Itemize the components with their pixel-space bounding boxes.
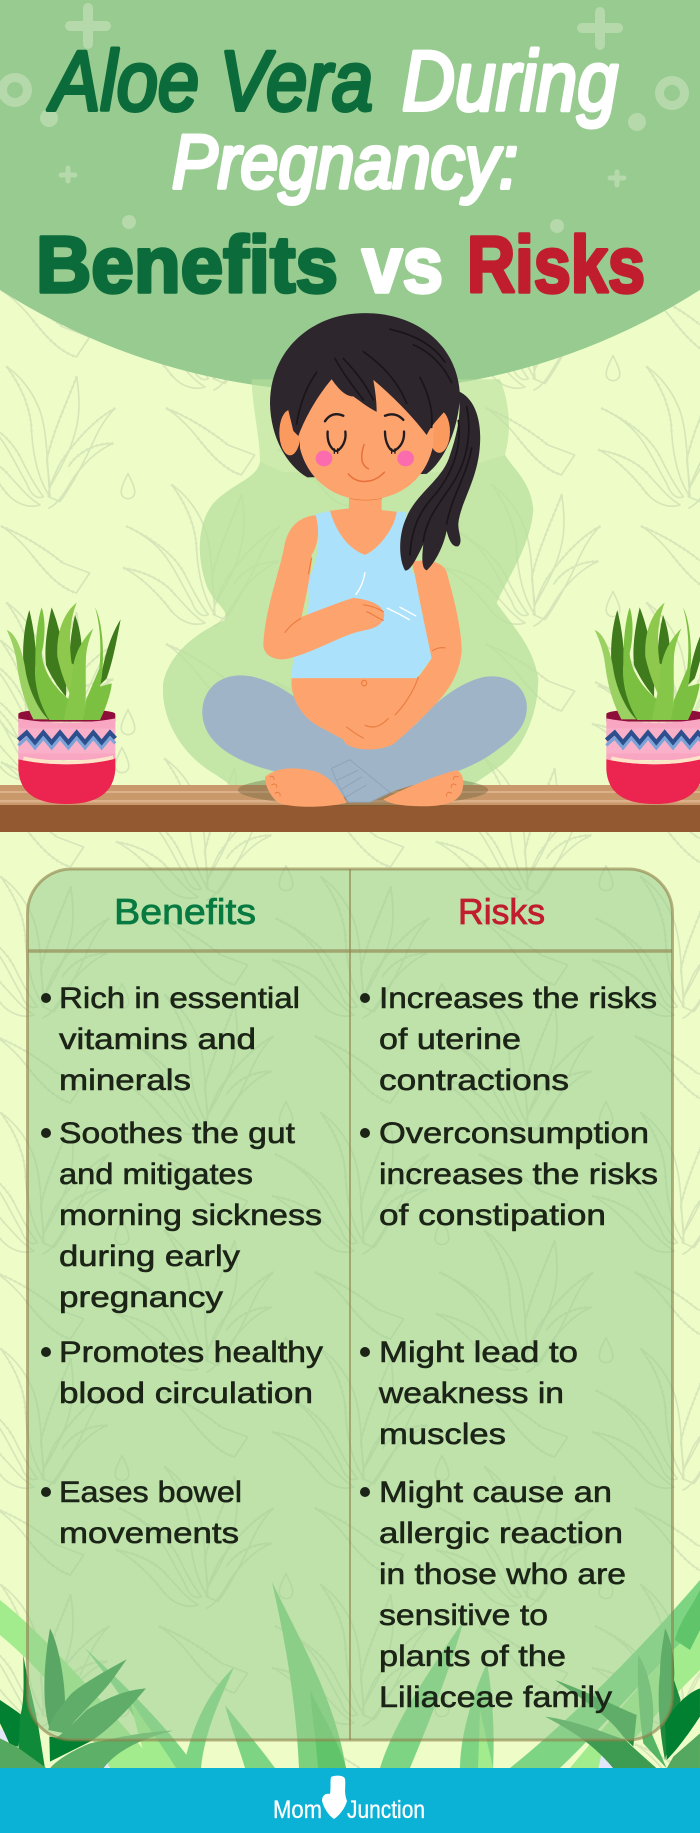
right foot [383,770,463,806]
tank top [292,511,432,678]
risks list: allergic reaction [379,1517,623,1550]
risks list: Increases the risks [379,982,657,1015]
hair strands [297,329,452,427]
fringe [282,324,455,436]
hair back [270,313,460,477]
wooden shelf [0,785,700,832]
pot leaves [7,603,121,720]
logo text: Mom [273,1796,322,1824]
risks list: muscles [379,1418,506,1451]
title: Pregnancy: [172,120,518,205]
risks heading: Risks [458,891,545,932]
risks list: weakness in [378,1377,564,1410]
oil streaks [356,573,416,620]
risks list: increases the risks [379,1158,658,1191]
potted aloe left [7,603,121,804]
risks list: of constipation [379,1199,606,1232]
title: Aloe Vera [47,34,373,128]
pot rim [18,709,115,722]
risks list: plants of the [379,1640,566,1673]
risks list: sensitive to [379,1599,548,1632]
title: Benefits [36,220,338,309]
zigzag band [18,728,115,753]
raised arm [263,515,384,659]
header divider [28,949,672,953]
toes [270,776,458,796]
benefits list: Promotes healthy [59,1336,323,1369]
benefits list: blood circulation [59,1377,313,1410]
benefits list: Soothes the gut [59,1117,296,1150]
left plant [0,1628,173,1768]
potted aloe right [595,603,700,804]
footer bar [0,1768,700,1833]
woman illustration [202,313,527,807]
shelf shadow [238,774,488,806]
title [36,34,645,309]
ears [279,410,450,455]
risks list [360,982,658,1714]
risks list: contractions [379,1064,569,1097]
risks list: in those who are [379,1558,626,1591]
title: Risks [467,220,645,309]
light leaves [0,1580,700,1768]
benefits list: minerals [59,1064,191,1097]
bottom aloe leaves [0,1580,700,1768]
benefits list: pregnancy [59,1281,223,1314]
lower arm and hands [342,560,462,749]
title: vs [362,220,443,309]
header green semicircle [0,0,700,392]
benefits list: Rich in essential [59,982,300,1015]
trouser cuff [332,760,390,802]
pants [202,675,527,801]
benefits list: movements [59,1517,239,1550]
pot body [18,718,115,760]
nose and smile [348,445,384,481]
pot base [18,758,115,804]
header decorations [2,8,684,233]
risks list: Might lead to [379,1336,578,1369]
MomJunction logo [273,1776,425,1824]
green blob behind woman [163,379,538,789]
benefits list: vitamins and [59,1023,256,1056]
benefits list [41,982,323,1550]
body creases [285,498,445,738]
comparison table [28,869,672,1740]
cheeks [316,451,414,466]
table panel [28,869,672,1740]
benefits list: and mitigates [59,1158,253,1191]
benefits list: morning sickness [59,1199,322,1232]
risks list: of uterine [379,1023,521,1056]
benefits list: during early [59,1240,240,1273]
eyebrows and eyes [325,414,404,453]
left foot [265,768,347,807]
benefits list: Eases bowel [59,1476,242,1509]
logo icon [322,1776,347,1819]
benefits heading: Benefits [114,891,256,932]
right plant [545,1628,700,1768]
belly [291,677,418,748]
face [298,369,435,500]
risks list: Might cause an [379,1476,612,1509]
MomJunction logo: Junction [347,1796,425,1824]
risks list: Overconsumption [379,1117,649,1150]
neck and chest [330,493,397,555]
title: During [402,34,618,128]
ponytail [400,391,480,571]
column divider [349,869,351,1740]
risks list: Liliaceae family [379,1681,612,1714]
